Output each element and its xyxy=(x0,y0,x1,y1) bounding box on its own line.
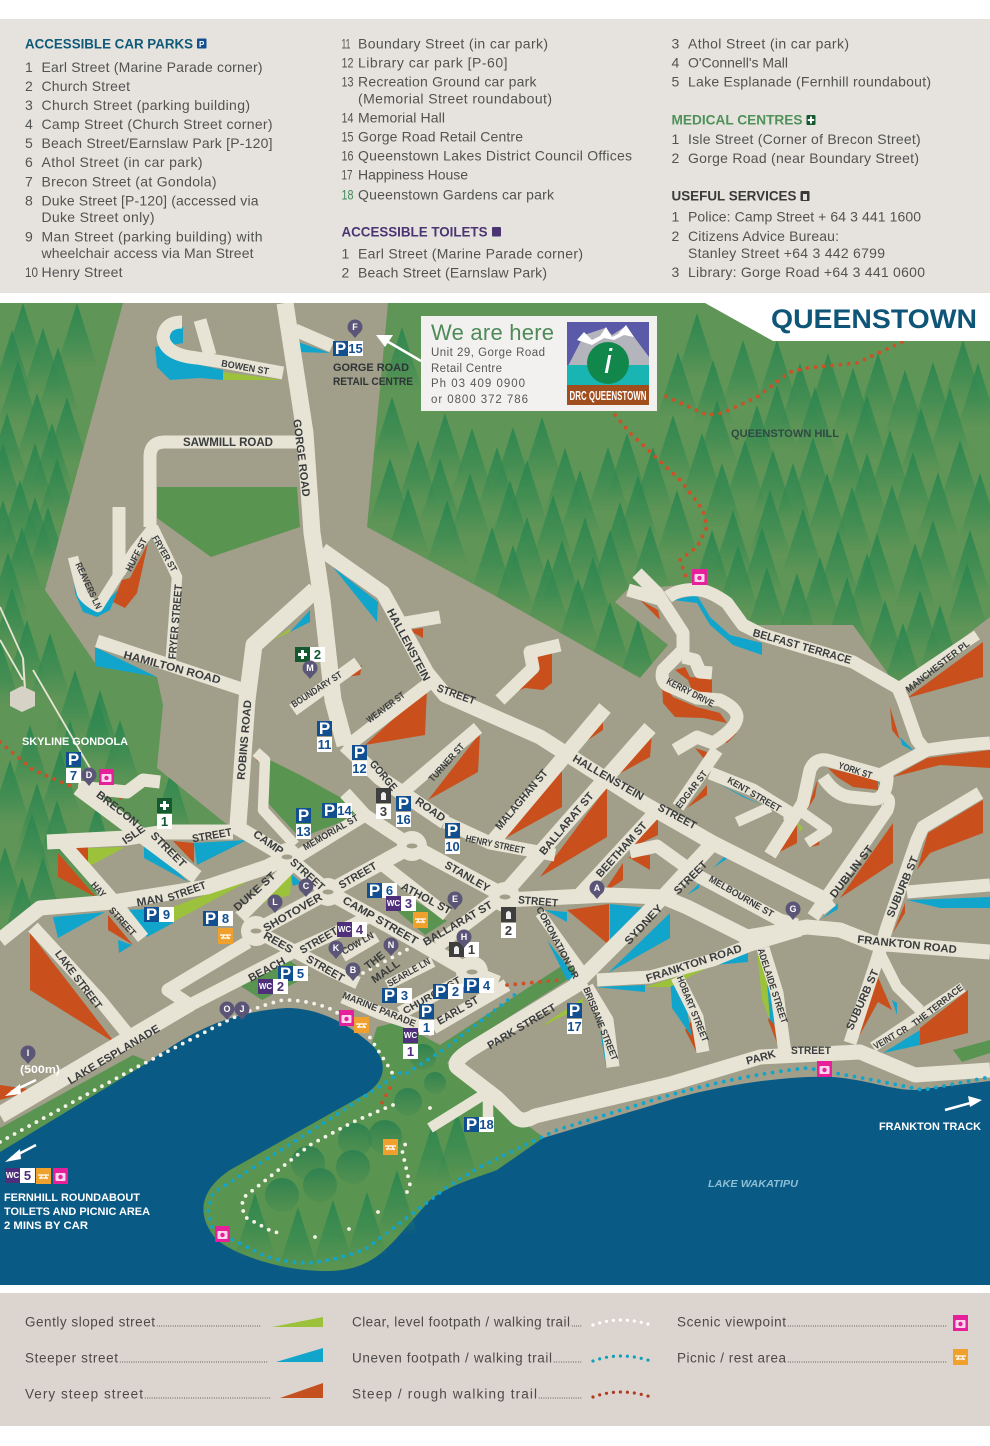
list: medical centres: Gorge Road (near Boundary Street) xyxy=(688,150,919,166)
parking markers: 6 xyxy=(386,883,393,898)
list: toilets 3 to 5: 5 xyxy=(672,74,680,90)
street name labels: REAVERS LN xyxy=(72,561,104,611)
list: car parks 11 to 18: (Memorial Street roundabout) xyxy=(358,90,552,106)
street name labels: BALLARAT ST xyxy=(421,899,495,949)
logo: DRC Queenstown: i xyxy=(604,343,613,381)
parking markers: P xyxy=(569,1001,580,1020)
street name labels: HALLENSTEIN xyxy=(384,607,432,683)
street name labels: ISLE xyxy=(120,823,148,847)
street name labels: DUBLIN ST xyxy=(828,843,876,901)
place labels: SKYLINE GONDOLA xyxy=(22,736,128,748)
place labels: TOILETS AND PICNIC AREA xyxy=(4,1206,150,1218)
street name labels: FRYER ST xyxy=(149,534,179,574)
street name labels: TURNER ST xyxy=(427,741,467,785)
list: useful services: 1 xyxy=(672,208,680,224)
street name labels: SYDNEY xyxy=(623,902,666,947)
lettered location pins: M xyxy=(306,663,314,673)
callout: we are here xyxy=(421,316,657,411)
parking markers: P xyxy=(466,1115,477,1134)
list: car parks 1 to 10: Man Street (parking building) with xyxy=(42,228,262,244)
parking markers: 17 xyxy=(567,1019,582,1034)
list: car parks 11 to 18: 12 xyxy=(342,54,354,70)
street name labels: STREET xyxy=(191,827,233,845)
parking markers: 3 xyxy=(401,988,408,1003)
accessible toilet markers: 4 xyxy=(356,922,364,937)
clear level trail dots xyxy=(0,948,430,1238)
parking markers: P xyxy=(319,719,330,738)
logo: DRC Queenstown xyxy=(567,322,649,405)
street name labels: BELFAST TERRACE xyxy=(751,627,853,667)
medical centre markers: 2 xyxy=(314,647,321,662)
street name labels: STREET xyxy=(287,856,327,894)
gently sloped street wedges xyxy=(88,372,803,1027)
street name labels: VEINT CR xyxy=(872,1024,910,1052)
list: toilets 1 and 2: 2 xyxy=(342,264,350,280)
useful service markers: 2 xyxy=(505,923,512,938)
legend: gently sloped street: Gently sloped street xyxy=(25,1314,155,1330)
street name labels: COW LN xyxy=(340,930,376,958)
street name labels: PARK STREET xyxy=(485,1002,559,1052)
place labels: (500m) xyxy=(20,1064,60,1076)
parking markers: 11 xyxy=(318,737,331,752)
street name labels: STREET xyxy=(791,1045,831,1057)
parking markers: P xyxy=(298,806,309,825)
callout address: Retail Centre xyxy=(431,363,502,375)
legend: scenic viewpoint: ...................................................................... xyxy=(787,1318,947,1328)
accessible toilet markers xyxy=(5,896,418,1183)
list: medical centres: 2 xyxy=(672,150,680,166)
list: car parks 11 to 18: 16 xyxy=(342,148,354,164)
street name labels: CORONATION DR xyxy=(533,905,581,981)
list: toilets 1 and 2: Earl Street (Marine Parade corner) xyxy=(358,246,583,262)
street name labels: HAY xyxy=(88,880,108,900)
parking markers: P xyxy=(335,339,346,358)
street name labels: ATHOL ST xyxy=(399,881,453,917)
street name labels: WEAVER ST xyxy=(365,690,407,726)
place labels: QUEENSTOWN HILL xyxy=(731,428,839,440)
place labels: FERNHILL ROUNDABOUT xyxy=(4,1192,140,1204)
list: car parks 1 to 10: Athol Street (in car park) xyxy=(42,154,202,170)
list: car parks 11 to 18: 15 xyxy=(342,128,354,144)
legend: steep trail: Steep / rough walking trail xyxy=(352,1386,537,1402)
parking markers: P xyxy=(354,743,365,762)
street name labels: FRYER STREET xyxy=(167,584,185,660)
list: car parks 11 to 18: Queenstown Lakes District Council Offices xyxy=(358,148,632,164)
list: medical centres: Isle Street (Corner of Brecon Street) xyxy=(688,131,921,147)
parking markers: 7 xyxy=(70,768,77,783)
street name labels: MANCHESTER PL xyxy=(904,639,972,695)
logo: DRC Queenstown: DRC QUEENSTOWN xyxy=(570,388,646,403)
street name labels: LAKE STREET xyxy=(52,948,104,1012)
list: toilets 1 and 2: Beach Street (Earnslaw Park) xyxy=(358,264,547,280)
parking markers: P xyxy=(280,964,291,983)
callout address: Unit 29, Gorge Road xyxy=(431,347,545,359)
list: car parks 1 to 10: Camp Street (Church Street corner) xyxy=(42,116,272,132)
list: car parks 11 to 18: 14 xyxy=(342,110,354,126)
medical centre markers xyxy=(157,647,325,829)
title banner xyxy=(705,303,990,341)
place labels: LAKE WAKATIPU xyxy=(708,1178,798,1190)
street name labels: STREET xyxy=(672,859,710,897)
legend: scenic viewpoint xyxy=(677,1314,968,1331)
legend: steep trail xyxy=(352,1386,651,1402)
lettered location pins: K xyxy=(333,943,340,953)
heading: useful services: USEFUL SERVICES xyxy=(672,188,796,204)
parking markers: 9 xyxy=(163,907,170,922)
parking markers: P xyxy=(384,986,395,1005)
picnic area icons xyxy=(36,912,428,1184)
list: useful services: Stanley Street +64 3 442 6799 xyxy=(688,245,885,261)
forest background xyxy=(0,303,990,1285)
list: car parks 1 to 10: Duke Street only) xyxy=(42,209,154,225)
street name labels: PARK xyxy=(745,1048,777,1068)
street name labels: BRISBANE STREET xyxy=(580,986,620,1062)
lake xyxy=(0,1008,990,1285)
legend: uneven trail: Uneven footpath / walking trail xyxy=(352,1350,552,1366)
street name labels: MARINE PARADE xyxy=(341,990,417,1030)
street name labels: HOBART STREET xyxy=(674,974,710,1044)
street name labels: HAMILTON ROAD xyxy=(122,649,222,687)
lettered location pins: L xyxy=(272,897,278,907)
list: useful services: Police: Camp Street + 64 3 441 1600 xyxy=(688,208,921,224)
legend: picnic area: ...................................................................... xyxy=(787,1354,947,1364)
lettered location pins: J xyxy=(239,1004,245,1014)
list: useful services: Library: Gorge Road +64 3 441 0600 xyxy=(688,264,925,280)
list: useful services: 3 xyxy=(672,264,680,280)
parking markers: P xyxy=(421,1002,432,1021)
place labels: FRANKTON TRACK xyxy=(879,1121,981,1133)
list: car parks 1 to 10: 5 xyxy=(25,135,33,151)
parking markers: P xyxy=(447,821,458,840)
list: car parks 1 to 10 xyxy=(25,59,272,280)
list: car parks 11 to 18 xyxy=(342,36,632,202)
street name labels: GORGE xyxy=(367,758,399,794)
street name labels: CAMP STREET xyxy=(340,895,420,948)
gondola cable and cabin xyxy=(0,607,90,768)
list: car parks 1 to 10: Church Street (parking building) xyxy=(42,97,250,113)
street name labels: LAKE ESPLANADE xyxy=(66,1023,162,1087)
list: car parks 1 to 10: 7 xyxy=(25,174,33,190)
lettered location pins: E xyxy=(452,894,458,904)
street name labels: MEMORIAL ST xyxy=(301,813,361,853)
callout address: Ph 03 409 0900 xyxy=(431,378,525,390)
list: car parks 11 to 18: 18 xyxy=(342,186,354,202)
legend: steeper street: Steeper street xyxy=(25,1350,118,1366)
heading: accessible car parks: P xyxy=(199,40,205,49)
street name labels: SUBURB ST xyxy=(885,854,921,919)
accessible toilet markers: 3 xyxy=(405,896,412,911)
very steep street wedges xyxy=(0,543,990,1115)
street name labels: BOUNDARY ST xyxy=(290,670,344,710)
accessible toilet markers: 5 xyxy=(24,1168,31,1183)
parking markers: P xyxy=(146,905,157,924)
lettered location pins: H xyxy=(461,932,467,942)
street name labels: HALLENSTEIN xyxy=(570,753,646,803)
parking markers: P xyxy=(466,976,477,995)
street name labels: SHOTOVER xyxy=(261,891,325,935)
legend: picnic area: Picnic / rest area xyxy=(677,1350,786,1366)
legend: steeper street: ................................................................. xyxy=(119,1354,268,1364)
street name labels: EDGAR ST xyxy=(674,769,710,811)
steep trail dots xyxy=(0,342,902,1103)
legend: gently sloped street xyxy=(25,1314,323,1330)
parking markers: P xyxy=(435,982,446,1001)
lettered location pins: D xyxy=(86,770,93,780)
panel: legend xyxy=(0,1293,990,1426)
legend: picnic area xyxy=(677,1349,968,1366)
steeper street wedges xyxy=(53,327,990,1067)
list: car parks 1 to 10: Earl Street (Marine Parade corner) xyxy=(42,59,262,75)
list: useful services: 2 xyxy=(672,228,680,244)
legend: very steep street: Very steep street xyxy=(25,1386,143,1402)
street name labels: DUKE ST xyxy=(232,870,279,914)
list: car parks 11 to 18: 13 xyxy=(342,74,354,90)
gardens trees xyxy=(232,1044,480,1279)
legend: steeper street xyxy=(25,1348,323,1366)
street name labels: THE xyxy=(363,949,387,973)
street name labels: SEARLE LN xyxy=(385,956,433,990)
list: toilets 3 to 5: 4 xyxy=(672,54,680,70)
legend: steep trail: ................... xyxy=(538,1390,582,1400)
street name labels: STREET xyxy=(106,905,138,939)
street name labels: STANLEY xyxy=(442,859,492,895)
legend: gently sloped street: .............................................. xyxy=(156,1318,261,1328)
medical centre markers: 1 xyxy=(161,814,168,829)
street name labels: BRECON xyxy=(94,789,140,829)
list: useful services: Citizens Advice Bureau: xyxy=(688,228,839,244)
list: toilets 3 to 5: 3 xyxy=(672,36,680,52)
parking markers: 10 xyxy=(445,839,460,854)
parking markers: P xyxy=(205,909,216,928)
street name labels: CHURCH ST xyxy=(401,975,463,1017)
street name labels: STREET xyxy=(337,860,379,892)
callout address xyxy=(431,347,545,406)
callout address: or 0800 372 786 xyxy=(431,394,528,406)
accessible toilet markers: WC xyxy=(6,1171,19,1180)
street name labels: MAN xyxy=(136,893,164,909)
accessible toilet markers: WC xyxy=(259,982,272,991)
uneven trail dots xyxy=(208,993,990,1263)
list: car parks 1 to 10: 6 xyxy=(25,154,33,170)
street name labels: MELBOURNE ST xyxy=(707,874,776,920)
parking markers: 15 xyxy=(348,341,363,356)
street name labels: BEETHAM ST xyxy=(594,820,650,880)
parking markers: 5 xyxy=(297,966,304,981)
list: toilets 1 and 2 xyxy=(342,246,583,280)
useful service markers: 1 xyxy=(468,942,475,957)
list: car parks 11 to 18: Recreation Ground car park xyxy=(358,74,538,90)
parks xyxy=(0,487,990,1290)
street name labels: ROBINS ROAD xyxy=(236,700,254,780)
list: toilets 3 to 5: Athol Street (in car park) xyxy=(688,36,849,52)
parking markers: 1 xyxy=(423,1020,430,1035)
street name labels: ADELAIDE STREET xyxy=(755,947,789,1025)
parking markers: P xyxy=(324,801,335,820)
lettered location pins: G xyxy=(789,904,797,914)
street name labels: HUFF ST xyxy=(124,536,150,574)
lettered location pins: C xyxy=(303,881,310,891)
accessible toilet markers: WC xyxy=(404,1031,417,1040)
accessible toilet markers: 2 xyxy=(277,979,284,994)
lettered location pins: N xyxy=(388,940,394,950)
title banner: QUEENSTOWN xyxy=(771,304,977,334)
list: car parks 1 to 10: Duke Street [P-120] (accessed via xyxy=(42,192,259,208)
street name labels: SAWMILL ROAD xyxy=(183,437,273,449)
panel: map xyxy=(0,303,990,1290)
street name labels: REES xyxy=(261,930,295,956)
street name labels: STREET xyxy=(298,925,340,957)
accessible toilet markers: WC xyxy=(387,899,400,908)
legend: very steep street: ....................................................... xyxy=(144,1390,271,1400)
list: car parks 1 to 10: 8 xyxy=(25,192,33,208)
street name labels: KENT STREET xyxy=(725,775,783,815)
list: car parks 1 to 10: wheelchair access via Man Street xyxy=(40,245,254,261)
list: car parks 1 to 10: 4 xyxy=(25,116,33,132)
useful service markers: 3 xyxy=(380,804,387,819)
list: toilets 3 to 5: Lake Esplanade (Fernhill roundabout) xyxy=(688,74,931,90)
lettered location pins xyxy=(20,320,800,1064)
list: car parks 11 to 18: 11 xyxy=(342,36,351,52)
street name labels: EARL ST xyxy=(435,994,481,1028)
street name labels: STREET xyxy=(166,879,208,904)
list: car parks 1 to 10: 2 xyxy=(25,78,33,94)
parking markers: P xyxy=(68,750,79,769)
street name labels: YORK ST xyxy=(837,760,873,782)
lettered location pins: B xyxy=(350,965,357,975)
accessible toilet markers: WC xyxy=(338,925,351,934)
list: car parks 1 to 10: 1 xyxy=(25,59,33,75)
street name labels: FRANKTON ROAD xyxy=(645,943,743,985)
road network xyxy=(0,303,990,1128)
legend: clear level trail: Clear, level footpath / walking trail xyxy=(352,1314,570,1330)
scenic viewpoint icons xyxy=(53,569,832,1242)
parking markers: 4 xyxy=(483,978,491,993)
lettered location pins: F xyxy=(352,322,358,332)
street name labels: KERRY DRIVE xyxy=(664,676,716,710)
street name labels: STREET xyxy=(304,953,346,985)
panel: accessibility listings xyxy=(0,19,990,293)
heading: accessible car parks: ACCESSIBLE CAR PARKS xyxy=(25,36,193,52)
street name labels: FRANKTON ROAD xyxy=(857,934,957,956)
parking markers: P xyxy=(398,794,409,813)
legend: very steep street xyxy=(25,1383,323,1402)
roundabouts xyxy=(241,831,520,988)
list: car parks 11 to 18: Memorial Hall xyxy=(358,110,445,126)
lettered location pins: O xyxy=(223,1004,231,1014)
list: toilets 1 and 2: 1 xyxy=(342,246,350,262)
parking markers: 13 xyxy=(296,824,311,839)
place labels: RETAIL CENTRE xyxy=(333,376,413,388)
legend: clear level trail: ..... xyxy=(571,1318,582,1328)
list: car parks 11 to 18: Library car park [P-60] xyxy=(358,54,508,70)
list: medical centres xyxy=(672,131,921,166)
list: car parks 11 to 18: Queenstown Gardens car park xyxy=(358,186,555,202)
street name labels: MALL xyxy=(369,958,403,986)
list: car parks 1 to 10: Church Street xyxy=(42,78,130,94)
list: car parks 11 to 18: Boundary Street (in car park) xyxy=(358,36,548,52)
street name labels: GORGE ROAD xyxy=(290,419,312,497)
list: car parks 11 to 18: Gorge Road Retail Centre xyxy=(358,128,523,144)
list: car parks 1 to 10: 3 xyxy=(25,97,33,113)
list: car parks 1 to 10: Beach Street/Earnslaw Park [P-120] xyxy=(42,135,272,151)
useful service markers xyxy=(376,788,516,957)
parking markers: 2 xyxy=(452,984,459,999)
lettered location pins: I xyxy=(27,1048,29,1058)
parking markers: 14 xyxy=(337,803,352,818)
street name labels: BEACH xyxy=(247,955,288,985)
street name labels: STREET xyxy=(148,830,188,870)
parking markers: 12 xyxy=(352,761,367,776)
parking markers: 16 xyxy=(396,812,411,827)
accessible toilet markers: 1 xyxy=(407,1044,414,1059)
list: toilets 3 to 5 xyxy=(672,36,931,90)
street name labels: STREET xyxy=(656,802,699,832)
list: medical centres: 1 xyxy=(672,131,680,147)
legend: uneven trail: ............ xyxy=(553,1354,582,1364)
white direction arrows xyxy=(5,335,982,1162)
street name labels: HENRY STREET xyxy=(465,833,526,857)
street name labels: MALAGHAN ST xyxy=(493,767,551,833)
street name labels xyxy=(52,358,972,1087)
list: car parks 11 to 18: 17 xyxy=(342,166,353,182)
place labels xyxy=(4,362,981,1232)
parking markers xyxy=(66,339,582,1134)
list: car parks 1 to 10: 9 xyxy=(25,228,33,244)
street name labels: STREET xyxy=(435,683,477,708)
list: car parks 11 to 18: Happiness House xyxy=(358,166,468,182)
land xyxy=(0,303,990,1180)
street name labels: THE TERRACE xyxy=(910,983,966,1029)
street name labels: SUBURB ST xyxy=(844,968,882,1032)
street name labels: CAMP xyxy=(251,828,285,858)
parking markers: 8 xyxy=(222,911,229,926)
lettered location pins: A xyxy=(594,883,601,893)
street name labels: BOWEN ST xyxy=(220,358,270,378)
heading: medical centres: MEDICAL CENTRES xyxy=(672,112,802,128)
parking markers: P xyxy=(369,881,380,900)
parking markers: 18 xyxy=(479,1117,494,1132)
list: car parks 1 to 10: Brecon Street (at Gondola) xyxy=(42,174,216,190)
list: useful services xyxy=(672,208,925,280)
callout heading: We are here xyxy=(431,320,554,345)
legend: uneven trail xyxy=(352,1350,651,1366)
place labels: GORGE ROAD xyxy=(333,362,409,374)
legend: scenic viewpoint: Scenic viewpoint xyxy=(677,1314,786,1330)
heading: accessible toilets: ACCESSIBLE TOILETS xyxy=(342,224,488,240)
street name labels: BALLARAT ST xyxy=(537,790,597,858)
list: car parks 1 to 10: 10 xyxy=(25,264,38,280)
list: car parks 1 to 10: Henry Street xyxy=(42,264,123,280)
street name labels: STREET xyxy=(518,894,559,910)
street name labels: ROAD xyxy=(413,795,447,825)
place labels: 2 MINS BY CAR xyxy=(4,1220,88,1232)
list: toilets 3 to 5: O'Connell's Mall xyxy=(688,54,788,70)
